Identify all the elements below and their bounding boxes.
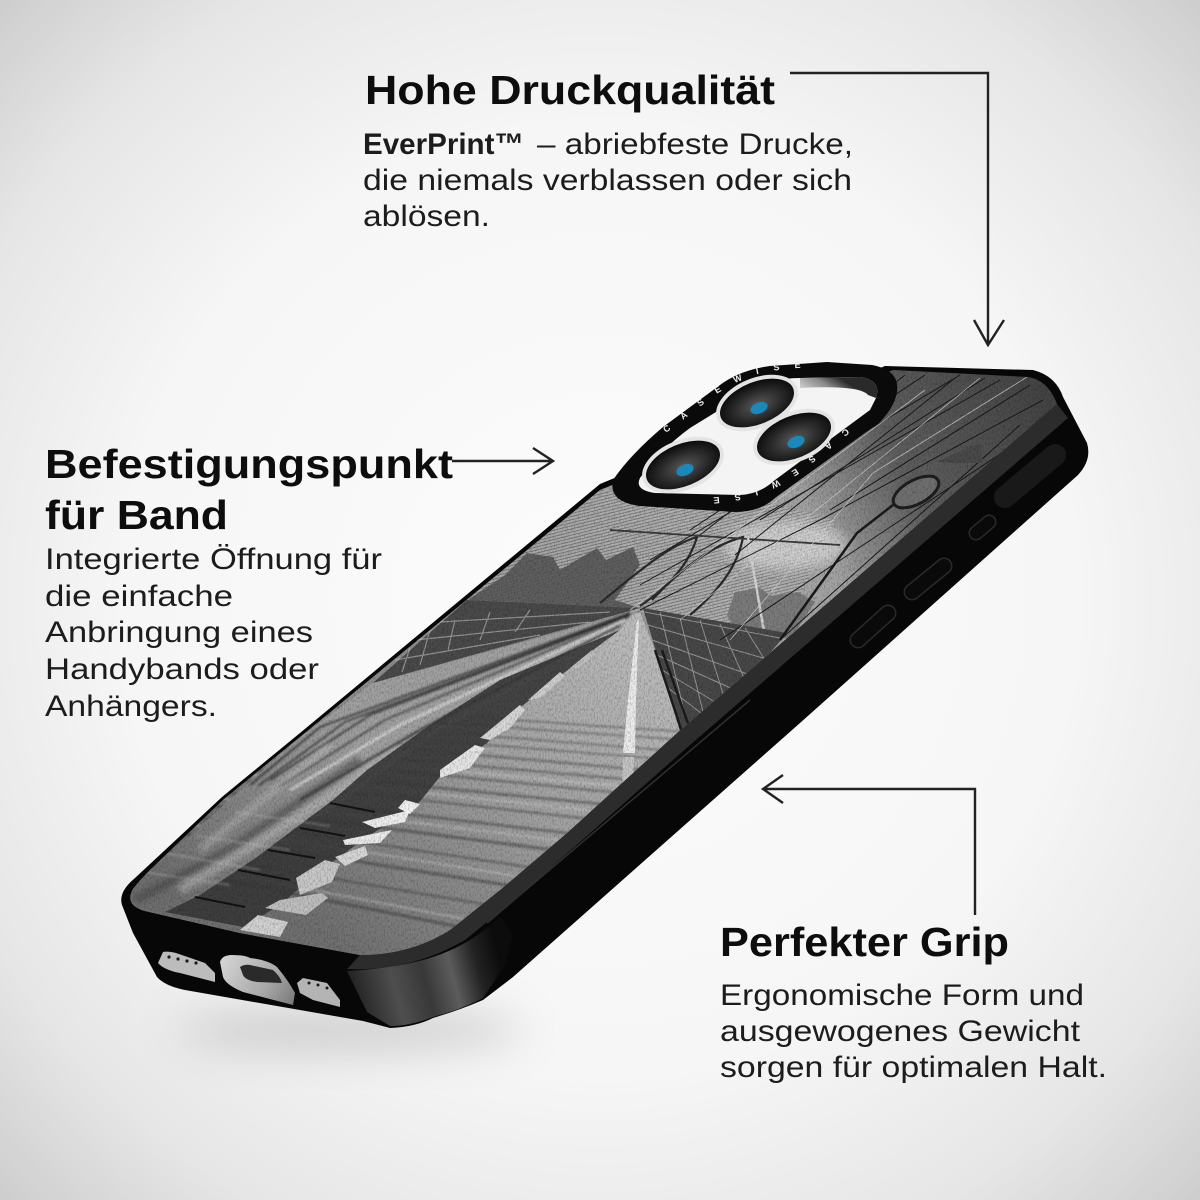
case side highlight	[487, 700, 750, 923]
body text	[720, 979, 1107, 1084]
sky and upper bridge	[130, 370, 1057, 955]
fine cable hatch	[467, 490, 835, 623]
phone case with printed bridge photo	[121, 362, 1088, 1028]
printed photo	[130, 370, 1057, 955]
side buttons	[858, 455, 1055, 640]
brand ring text: CASEWISE	[714, 429, 848, 504]
body text	[363, 128, 853, 233]
bump frame	[612, 362, 897, 512]
upper suspension cables	[640, 375, 1059, 640]
camera bump	[612, 362, 898, 512]
plank seams	[152, 706, 680, 928]
left streak zone	[125, 612, 633, 912]
callout: perfect grip	[720, 919, 1107, 1084]
brand ring text	[664, 362, 848, 504]
center lane line	[623, 620, 639, 753]
body text: Anbringung eines	[45, 616, 313, 649]
body text: sorgen für optimalen Halt.	[720, 1051, 1107, 1084]
arrow: perfect grip	[763, 775, 975, 915]
lens 3	[634, 426, 732, 504]
body text: Ergonomische Form und	[720, 979, 1084, 1012]
lens 2	[745, 398, 843, 476]
body text: Integrierte Öffnung für	[45, 543, 382, 576]
lamp post	[780, 443, 983, 640]
heading: Befestigungspunkt	[45, 441, 453, 487]
case side bevel	[347, 404, 1068, 969]
heading: für Band	[45, 492, 228, 538]
brand ring text: CASEWISE	[664, 362, 800, 432]
road surface	[110, 612, 684, 965]
body text: – abriebfeste Drucke,	[537, 128, 853, 161]
right fence wedge	[643, 608, 787, 738]
right skyline	[727, 588, 815, 640]
charging and speaker ports	[158, 952, 340, 1007]
white lane dashes	[240, 650, 595, 937]
USB port	[220, 955, 295, 1005]
railing	[655, 650, 691, 738]
arrow: strap attachment	[452, 448, 553, 474]
window top shading	[800, 377, 877, 398]
body text: Handybands oder	[45, 653, 319, 686]
body text: ausgewogenes Gewicht	[720, 1015, 1081, 1048]
callout: print quality	[363, 67, 853, 233]
dark plank band	[165, 630, 620, 927]
body text: die niemals verblassen oder sich	[363, 164, 852, 197]
bump window	[639, 377, 877, 495]
case body	[121, 366, 1088, 1028]
arrow: print quality	[790, 73, 1004, 345]
lens 1	[708, 364, 806, 442]
body text: ablösen.	[363, 200, 490, 233]
case bottom corner sheen	[347, 917, 513, 1026]
body text: Anhängers.	[45, 690, 217, 723]
heading: Hohe Druckqualität	[365, 67, 775, 113]
photo grain	[110, 360, 1070, 970]
body text: EverPrint™	[363, 128, 524, 161]
speaker left	[158, 952, 215, 982]
body text	[45, 543, 382, 723]
left skyline	[468, 547, 640, 608]
heading	[45, 441, 453, 538]
heading: Perfekter Grip	[720, 919, 1009, 965]
left deck and fence	[373, 600, 640, 683]
speaker right	[297, 978, 340, 1007]
callout: strap attachment	[45, 441, 453, 723]
bridge arches	[600, 530, 840, 655]
phone shadow	[175, 1010, 525, 1050]
cloud brightening	[723, 521, 847, 569]
body text: die einfache	[45, 580, 233, 613]
